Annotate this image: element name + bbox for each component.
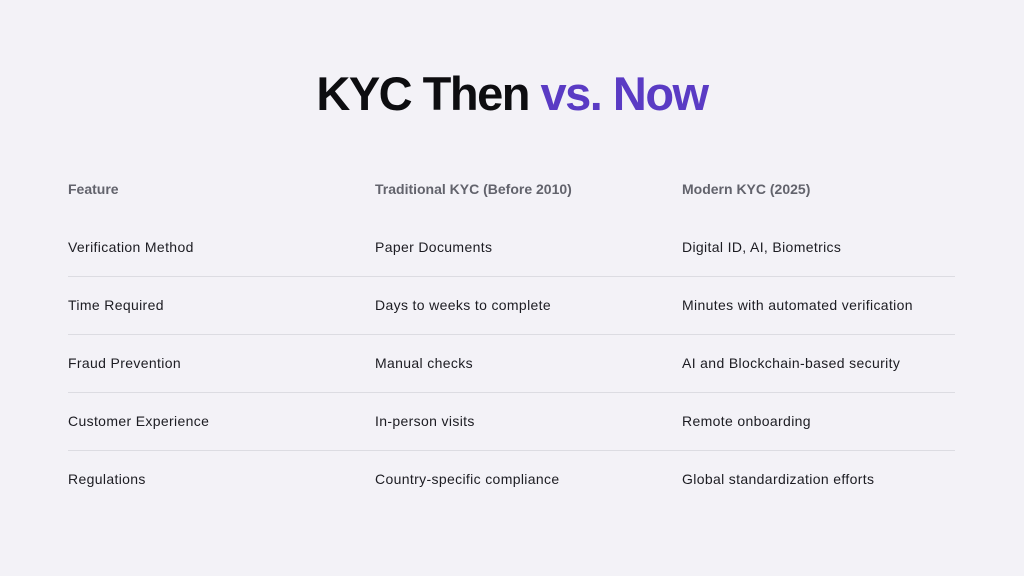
row: customer experience: Remote onboarding xyxy=(682,413,811,429)
row: verification method: Paper Documents xyxy=(375,239,492,255)
row: regulations: Global standardization efforts xyxy=(682,471,874,487)
row: fraud prevention: AI and Blockchain-based security xyxy=(682,355,900,371)
row: regulations: Country-specific compliance xyxy=(375,471,560,487)
row: time required: Time Required xyxy=(68,297,164,313)
row: customer experience: Customer Experience xyxy=(68,413,209,429)
row: regulations: Regulations xyxy=(68,471,146,487)
row: time required xyxy=(68,297,913,313)
row: fraud prevention xyxy=(68,355,900,371)
row: customer experience: In-person visits xyxy=(375,413,475,429)
row: time required: Days to weeks to complete xyxy=(375,297,551,313)
row: verification method: Verification Method xyxy=(68,239,194,255)
row: regulations xyxy=(68,471,874,487)
row: verification method: Digital ID, AI, Biometrics xyxy=(682,239,841,255)
row: time required: Minutes with automated verification xyxy=(682,297,913,313)
title: KYC Then vs. Now xyxy=(316,67,708,120)
row: customer experience xyxy=(68,413,811,429)
table header: Modern KYC (2025) xyxy=(682,181,810,197)
table header: Feature xyxy=(68,181,119,197)
table header: Traditional KYC (Before 2010) xyxy=(375,181,572,197)
row: fraud prevention: Manual checks xyxy=(375,355,473,371)
table header xyxy=(68,181,810,197)
row: fraud prevention: Fraud Prevention xyxy=(68,355,181,371)
row: verification method xyxy=(68,239,841,255)
